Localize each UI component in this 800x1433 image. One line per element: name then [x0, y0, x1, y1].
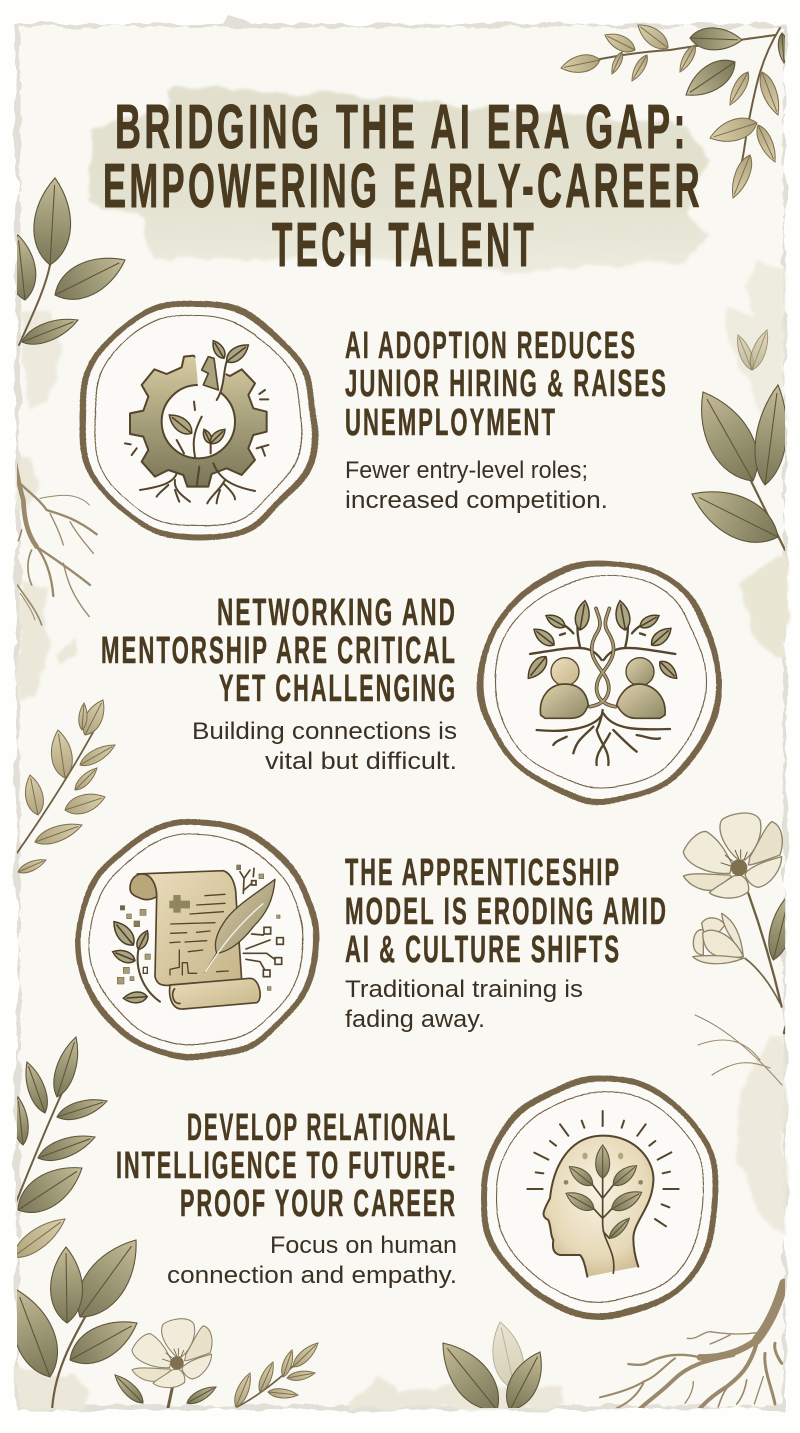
left roots: [15, 463, 97, 625]
top left leaves: [17, 177, 126, 346]
body 2: vital but difficult.: [265, 748, 457, 775]
heading 4: PROOF YOUR CAREER: [180, 1183, 457, 1225]
body 4: connection and empathy.: [167, 1262, 457, 1289]
small bottom sprig: [234, 1342, 319, 1408]
heading 4: INTELLIGENCE TO FUTURE-: [116, 1145, 457, 1187]
section 4: relational intelligence: [116, 1079, 719, 1315]
right twigs: [695, 1015, 782, 1085]
right flowers: [683, 813, 800, 1044]
bottom right roots: [600, 1283, 784, 1413]
bottom centre leaves: [442, 1321, 542, 1408]
body 2: [192, 718, 457, 775]
bottom left upper branch: [17, 1036, 108, 1258]
body 4: [167, 1232, 457, 1289]
heading 2: YET CHALLENGING: [219, 668, 457, 710]
bottom left large leaves: [17, 1239, 138, 1408]
heading 2: NETWORKING AND: [217, 592, 457, 634]
body 1: increased competition.: [345, 487, 608, 514]
top right branch: [559, 19, 788, 201]
title: [103, 93, 703, 280]
badge 3: scroll and quill: [80, 822, 316, 1058]
heading 1: UNEMPLOYMENT: [345, 402, 557, 444]
badge 1: cracked gear: [80, 303, 316, 539]
badge 2: two people and entwined tree: [483, 563, 719, 799]
right leaves: [691, 329, 785, 552]
heading 1: [345, 325, 668, 444]
body 2: Building connections is: [192, 718, 457, 745]
title: TECH TALENT: [272, 211, 537, 280]
body 1: [345, 457, 608, 514]
body 3: Traditional training is: [345, 976, 583, 1003]
body 4: Focus on human: [270, 1232, 457, 1259]
mid left branch: [16, 696, 118, 876]
section 2: networking: [101, 563, 719, 799]
badge 4: head with growing plant: [483, 1079, 719, 1315]
heading 3: [345, 852, 668, 971]
heading 2: MENTORSHIP ARE CRITICAL: [101, 630, 457, 672]
heading 2: [101, 592, 457, 710]
heading 4: DEVELOP RELATIONAL: [187, 1107, 457, 1149]
heading 4: [116, 1107, 457, 1225]
section 3: apprenticeship: [80, 822, 668, 1058]
bottom flower: [111, 1319, 218, 1408]
body 3: fading away.: [345, 1006, 485, 1033]
body 3: [345, 976, 583, 1033]
body 1: Fewer entry-level roles;: [345, 457, 588, 484]
section 1: AI adoption: [80, 303, 668, 539]
